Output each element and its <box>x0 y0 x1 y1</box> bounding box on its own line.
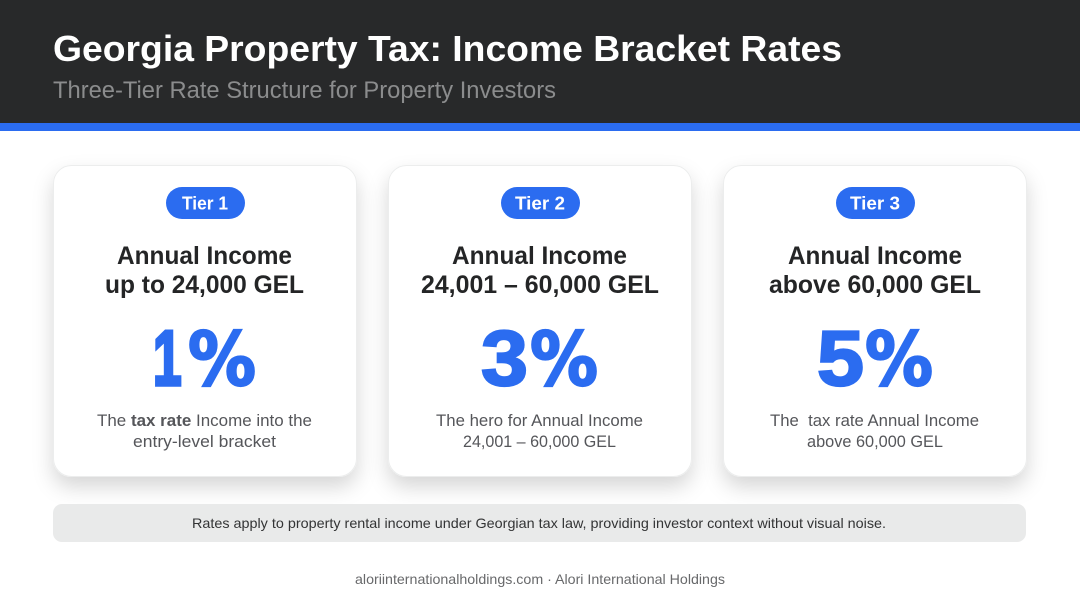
panel: tier 3 <box>724 166 1026 476</box>
tier 1 rate: % <box>188 317 256 403</box>
tier 2 rate <box>481 314 598 403</box>
panel: tier 2 <box>388 166 692 476</box>
tier 2 description: The hero for Annual Income <box>436 411 643 430</box>
title: Georgia Property Tax: Income Bracket Rates <box>53 28 842 69</box>
tier 3 rate: 5 <box>817 314 864 402</box>
tier 3 description: The tax rate Annual Income <box>770 411 979 430</box>
tier 3 rate <box>817 314 933 403</box>
footer: aloriinternationalholdings.com · Alori International Holdings <box>355 571 725 587</box>
tier 1 description: The tax rate Income into the <box>97 411 312 430</box>
tier 3 income range: above 60,000 GEL <box>769 271 981 299</box>
tier 2 income range: Annual Income <box>452 242 627 270</box>
tier 1 rate <box>153 315 256 403</box>
tier 3 rate: % <box>865 317 933 403</box>
tier 1 description: entry-level bracket <box>133 432 276 451</box>
tier 2 rate: 3 <box>481 314 528 402</box>
tier 1 badge: Tier 1 <box>182 194 228 214</box>
tier 2 rate: % <box>530 317 598 403</box>
tier 2 income range: 24,001 – 60,000 GEL <box>421 271 659 299</box>
tier 2 badge <box>501 187 580 219</box>
tier 1 rate: 1 <box>153 315 182 403</box>
subtitle: Three-Tier Rate Structure for Property Investors <box>53 77 556 104</box>
tier 1 income range: up to 24,000 GEL <box>105 271 304 299</box>
tier 3 income range: Annual Income <box>788 242 962 270</box>
tier 1 income range: Annual Income <box>117 242 292 270</box>
tier 3 badge <box>836 187 915 219</box>
context note bar <box>53 504 1026 542</box>
tier 2 description: 24,001 – 60,000 GEL <box>463 432 616 451</box>
tier 3 badge: Tier 3 <box>850 194 900 214</box>
tier 1 badge <box>166 187 245 219</box>
header band <box>0 0 1080 131</box>
panel: tier 1 <box>54 166 356 476</box>
tier 3 description: above 60,000 GEL <box>807 432 943 451</box>
context note bar: Rates apply to property rental income under Georgian tax law, providing investor context without visual noise. <box>192 515 886 531</box>
tier 2 badge: Tier 2 <box>515 194 565 214</box>
